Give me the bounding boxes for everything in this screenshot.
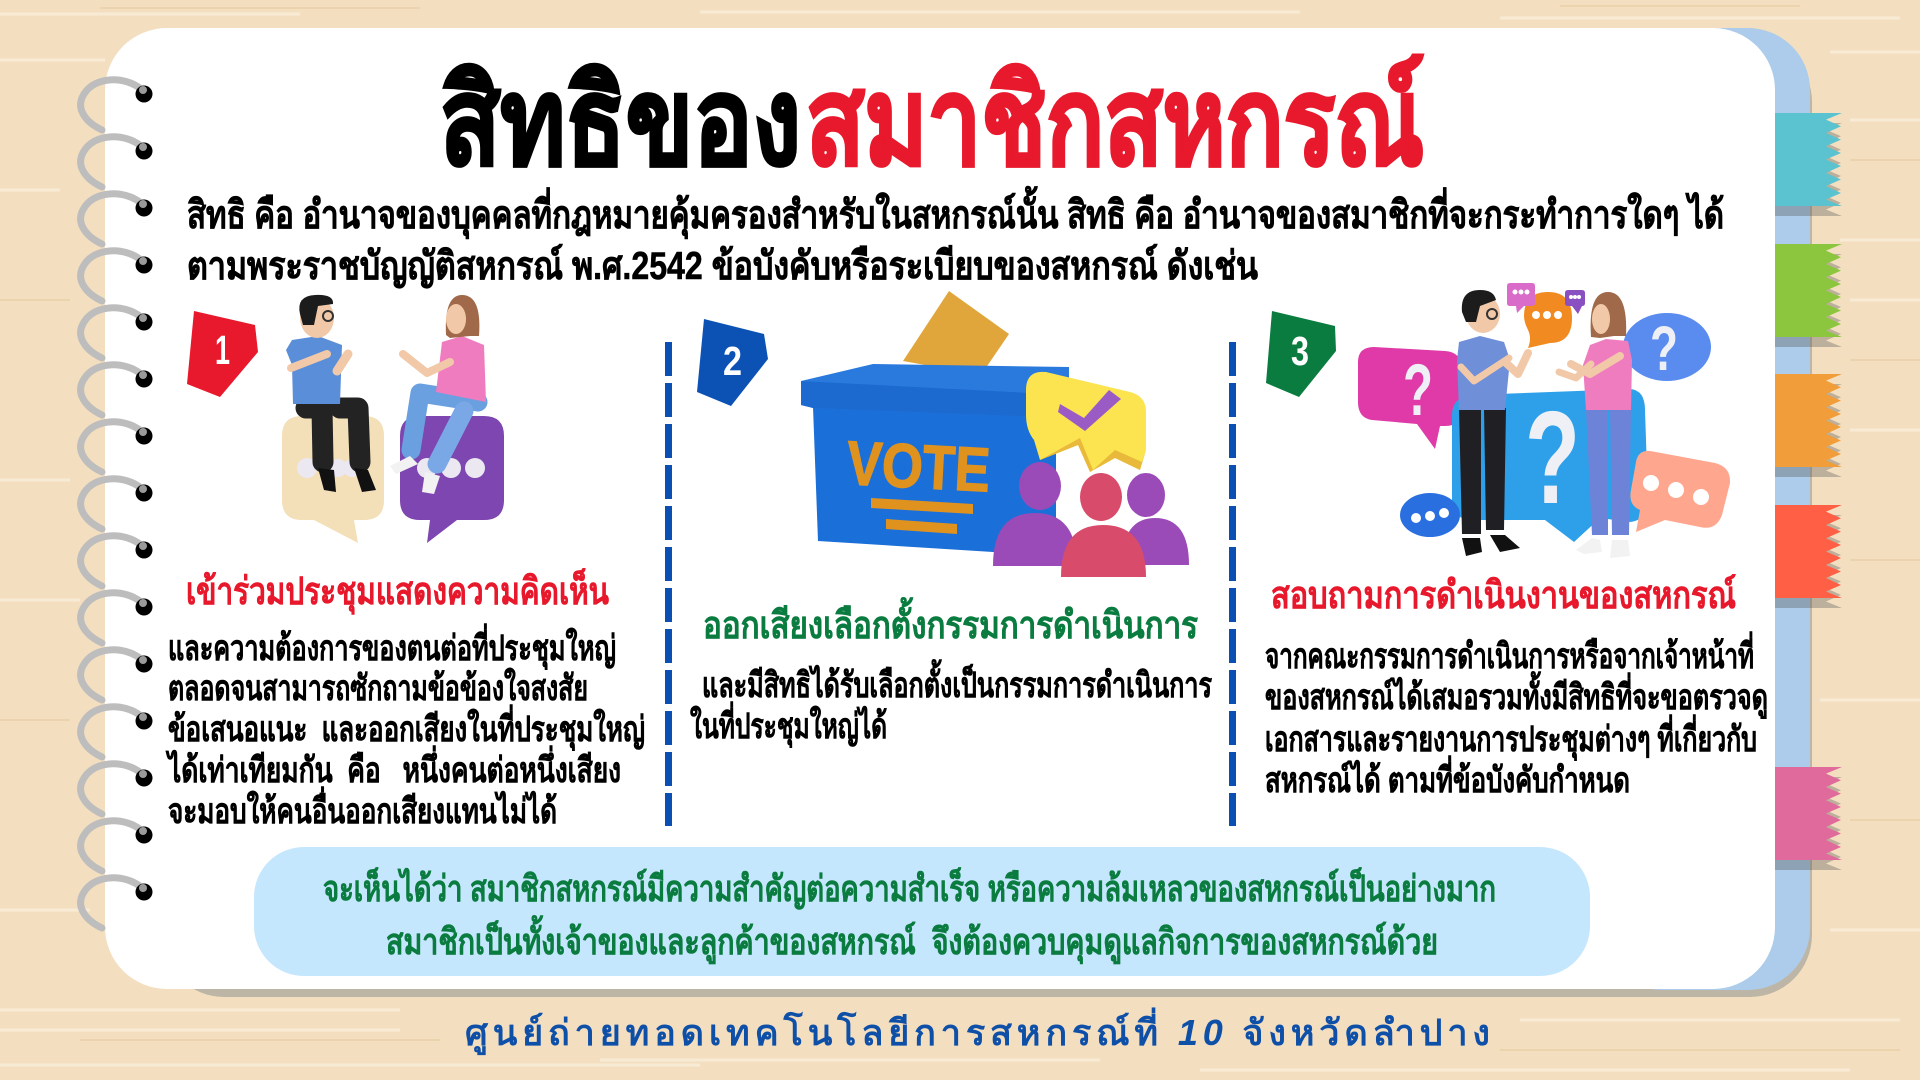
tab: red bbox=[1775, 505, 1842, 608]
tab: teal bbox=[1775, 113, 1842, 216]
footer: ศูนย์ถ่ายทอดเทคโนโลยีการสหกรณ์ที่ 10 จังหวัดลำปาง bbox=[465, 1007, 1490, 1056]
callout: สมาชิกเป็นทั้งเจ้าของและลูกค้าของสหกรณ์ จึงต้องควบคุมดูแลกิจการของสหกรณ์ด้วย bbox=[386, 915, 1438, 965]
body text 2: ในที่ประชุมใหญ่ได้ bbox=[690, 701, 887, 748]
white notebook page bbox=[105, 28, 1775, 989]
body text 1 bbox=[165, 623, 645, 831]
question marks: ? bbox=[1650, 314, 1678, 384]
callout: จะเห็นได้ว่า สมาชิกสหกรณ์มีความสำคัญต่อความสำเร็จ หรือความล้มเหลวของสหกรณ์เป็นอย่างมาก bbox=[323, 866, 1496, 910]
man standing bbox=[1457, 290, 1528, 556]
panel: right 2 bbox=[690, 291, 1212, 748]
intro text: ตามพระราชบัญญัติสหกรณ์ พ.ศ.2542 ข้อบังคับหรือระเบียบของสหกรณ์ ดังเช่น bbox=[187, 243, 1258, 289]
illustration: two people on chat bubbles bbox=[282, 295, 504, 543]
title bbox=[440, 54, 1424, 190]
illustration: two people and question bubbles bbox=[1358, 283, 1730, 558]
body text 1: และความต้องการของตนต่อที่ประชุมใหญ่ bbox=[168, 623, 616, 670]
badge 2: 2 bbox=[723, 338, 742, 384]
body text 1: จะมอบให้คนอื่นออกเสียงแทนไม่ได้ bbox=[168, 786, 557, 831]
panel: right 3 bbox=[1265, 283, 1768, 800]
badge 1 bbox=[187, 311, 258, 397]
badge 1: 1 bbox=[215, 327, 230, 373]
body text 1: ตลอดจนสามารถซักถามข้อข้องใจสงสัย bbox=[168, 667, 588, 708]
coloured index tabs bbox=[1775, 113, 1842, 870]
man seated bbox=[286, 295, 376, 492]
badge 3: 3 bbox=[1291, 328, 1309, 374]
spiral binding rings bbox=[81, 80, 152, 928]
vote label: VOTE bbox=[845, 429, 992, 505]
heading 1: เข้าร่วมประชุมแสดงความคิดเห็น bbox=[186, 568, 609, 615]
heading 3: สอบถามการดำเนินงานของสหกรณ์ bbox=[1271, 574, 1736, 617]
intro text bbox=[187, 186, 1724, 289]
people group bbox=[993, 462, 1189, 577]
tab: orange bbox=[1775, 374, 1842, 477]
badge 3 bbox=[1266, 311, 1336, 397]
question marks: ? bbox=[1403, 350, 1433, 431]
question marks bbox=[1403, 314, 1678, 531]
title: สมาชิกสหกรณ์ bbox=[806, 54, 1424, 190]
question marks: ? bbox=[1525, 384, 1580, 531]
tab: pink bbox=[1775, 767, 1842, 870]
illustration: vote box bbox=[801, 291, 1189, 577]
notebook back cover and shadow bbox=[162, 28, 1812, 997]
title: สิทธิของ bbox=[440, 54, 801, 190]
heading 2: ออกเสียงเลือกตั้งกรรมการดำเนินการ bbox=[703, 597, 1198, 647]
body text 3: สหกรณ์ได้ ตามที่ข้อบังคับกำหนด bbox=[1265, 755, 1630, 800]
body text 2: และมีสิทธิได้รับเลือกตั้งเป็นกรรมการดำเนินการ bbox=[702, 659, 1212, 705]
body text 3 bbox=[1265, 631, 1768, 800]
body text 1: ข้อเสนอแนะ และออกเสียงในที่ประชุมใหญ่ bbox=[168, 704, 645, 751]
yellow check bubble bbox=[1026, 372, 1146, 472]
panel: right 1 bbox=[165, 295, 645, 831]
body text 1: ได้เท่าเทียมกัน คือ หนึ่งคนต่อหนึ่งเสียง bbox=[165, 745, 621, 790]
tab: green bbox=[1775, 244, 1842, 347]
woman standing bbox=[1559, 292, 1632, 558]
body text 2 bbox=[690, 659, 1212, 748]
callout bbox=[254, 847, 1590, 976]
woman seated bbox=[390, 295, 486, 494]
badge 2 bbox=[697, 319, 768, 406]
column dividers bbox=[668, 342, 1232, 826]
